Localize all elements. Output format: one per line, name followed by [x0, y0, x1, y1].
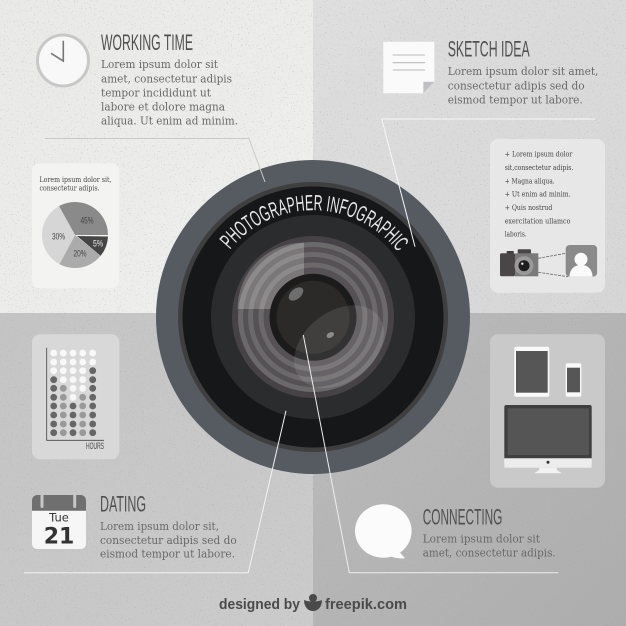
panel: pie chart card	[32, 163, 119, 288]
highlight: quarter sector	[238, 242, 304, 309]
leader line: working time	[45, 138, 265, 182]
text block: dating: Lorem ipsum dolor sit,	[100, 520, 219, 533]
camera lens	[156, 160, 470, 474]
axis label: hours: HOURS	[86, 441, 104, 452]
text block: dating: eismod tempor ut labore.	[100, 548, 235, 561]
chart axes	[47, 348, 104, 440]
lens rings	[240, 244, 386, 390]
panel: devices card	[490, 334, 605, 488]
icon: desktop monitor	[504, 405, 592, 473]
text block: working time: Lorem ipsum dolor sit	[101, 58, 219, 71]
text block: connecting: Lorem ipsum dolor sit	[423, 532, 541, 545]
pie chart: 30%	[52, 232, 65, 242]
footer credit: designed by	[219, 597, 300, 613]
icon: note	[383, 42, 434, 93]
text block: working time: aliqua. Ut enim ad minim.	[101, 115, 238, 128]
text block: working time: amet, consectetur adipis	[101, 72, 232, 85]
camera to portrait lines	[538, 253, 568, 277]
panel: pie chart card: Lorem ipsum dolor sit,	[40, 176, 112, 184]
text block: sketch idea: consectetur adipis sed do	[448, 79, 585, 92]
panel: list card with camera	[490, 139, 605, 293]
footer credit: freepik.com	[325, 597, 407, 613]
lens title: PHOTOGRAPHER INFOGRAPHIC	[219, 195, 408, 250]
text block: connecting	[423, 532, 556, 560]
leader line: dating	[24, 411, 286, 573]
icon: calendar: Tue	[48, 511, 69, 525]
text block: working time: labore et dolore magna	[101, 101, 225, 114]
heading: working time: WORKING TIME	[101, 30, 193, 55]
panel: list card with camera: sit,consectetur adipis.	[505, 164, 573, 172]
footer credit	[219, 594, 407, 613]
panel: list card with camera: exercitation ullamco	[505, 217, 570, 225]
pie chart	[42, 202, 108, 268]
pie chart: 20%	[74, 248, 86, 258]
icon: portrait	[566, 245, 597, 277]
panel: list card with camera: + Magna aliqua.	[505, 177, 555, 185]
icon: phone	[566, 363, 581, 397]
panel: list card with camera: + Ut enim ad minim.	[505, 191, 571, 199]
text block: working time	[101, 58, 238, 128]
panel: list card with camera: laboris.	[505, 231, 527, 239]
icon: camera	[500, 249, 538, 276]
panel: pie chart card: consectetur adipis.	[40, 185, 100, 193]
lens pupil	[270, 274, 356, 361]
icon: tablet	[514, 347, 549, 397]
text block: sketch idea	[448, 65, 598, 106]
text block: dating: consectetur adipis sed do	[100, 534, 237, 547]
icon: freepik crown	[304, 594, 322, 611]
leader line: connecting	[303, 335, 558, 573]
icon: calendar: 21	[44, 524, 74, 549]
highlight: lens reflection	[278, 288, 400, 405]
dot chart	[50, 350, 96, 436]
panel: dot chart card	[32, 334, 119, 459]
icon: speech bubble	[355, 504, 412, 558]
text block: sketch idea: Lorem ipsum dolor sit amet,	[448, 65, 598, 78]
pie chart: 5%	[93, 238, 103, 248]
text block: connecting: amet, consectetur adipis.	[423, 547, 556, 560]
pie chart: 45%	[80, 216, 94, 226]
text block: sketch idea: eismod tempor ut labore.	[448, 93, 583, 106]
heading: dating: DATING	[100, 492, 146, 517]
text block: dating	[100, 520, 237, 561]
icon: clock	[38, 35, 88, 86]
panel: list card with camera: + Quis nostrud	[505, 204, 553, 212]
panel: list card with camera: + Lorem ipsum dolor	[505, 151, 573, 159]
icon: calendar	[32, 494, 86, 549]
leader line: sketch idea	[382, 119, 595, 247]
heading: connecting: CONNECTING	[423, 504, 502, 529]
heading: sketch idea: SKETCH IDEA	[448, 37, 530, 62]
text block: working time: tempor incididunt ut	[101, 86, 212, 99]
